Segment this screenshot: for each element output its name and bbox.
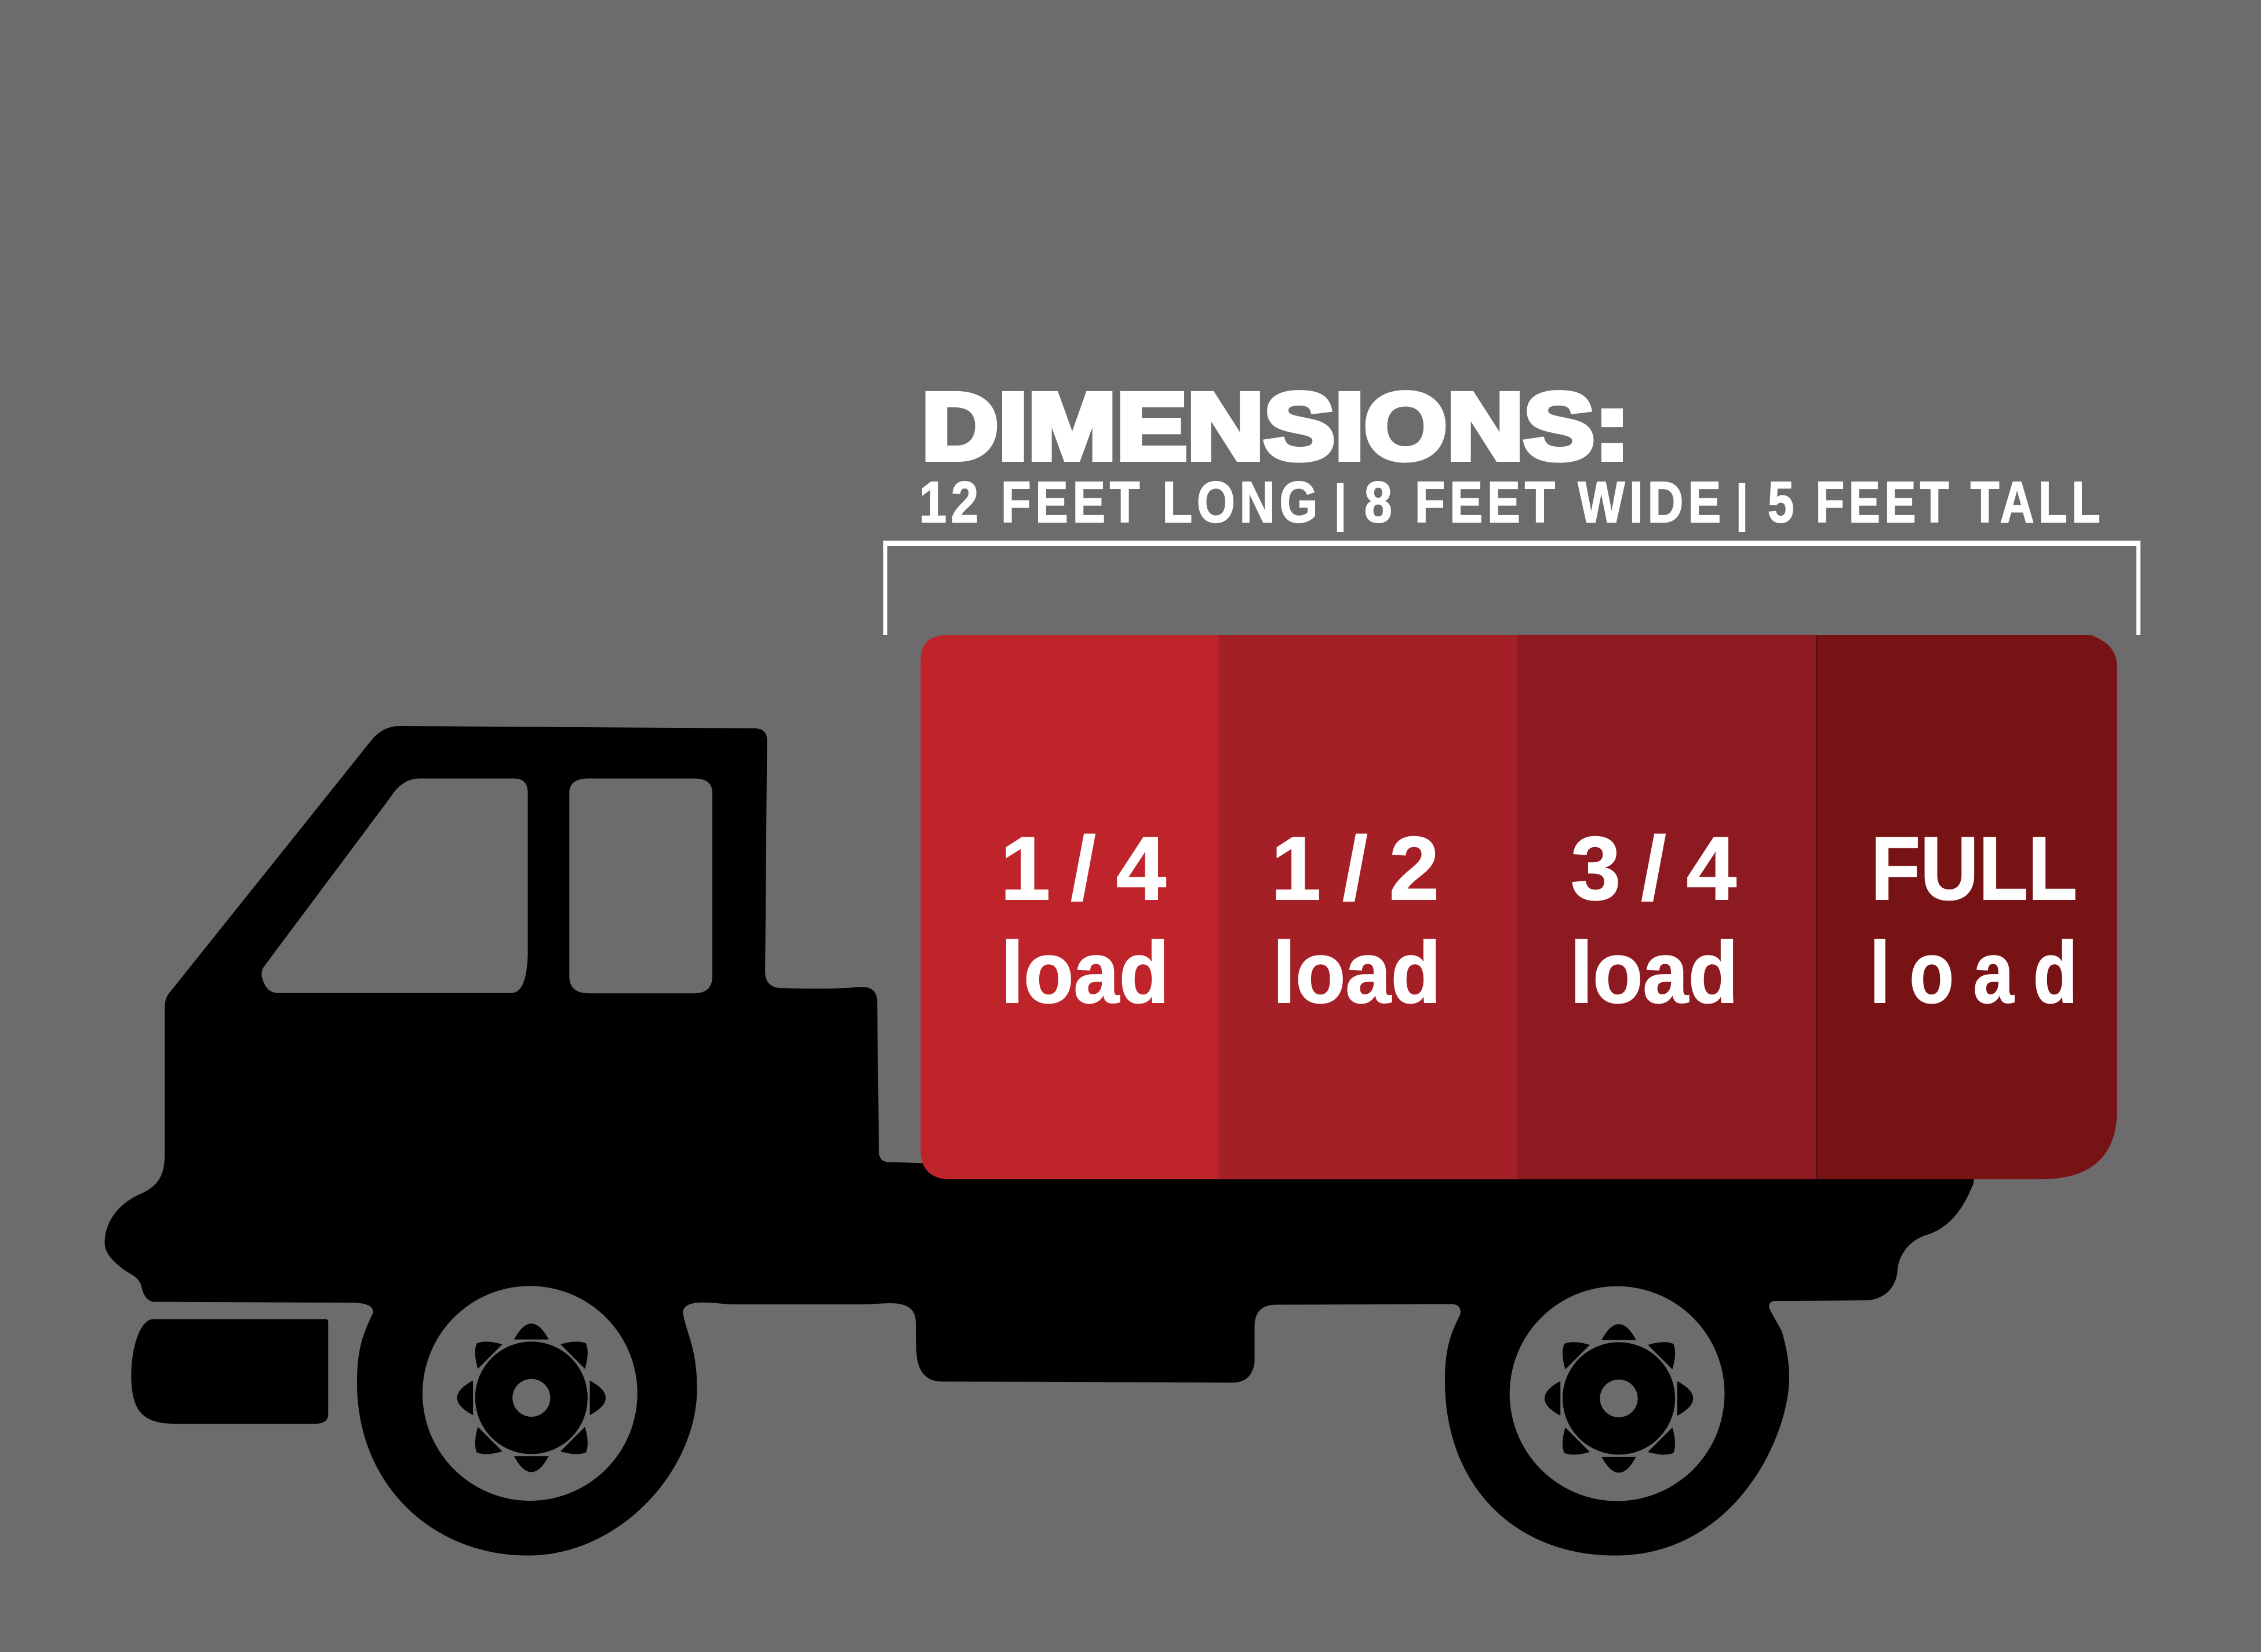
length: 12 FEET LONG <box>919 470 1322 535</box>
heading: dimensions: DIMENSIONS: <box>922 373 1630 479</box>
label: full load <box>1870 818 2097 1021</box>
segment: full load <box>1816 635 2117 1179</box>
cargo box with load segments <box>920 635 2117 1179</box>
front bumper <box>131 1319 328 1424</box>
rear window <box>569 779 712 993</box>
truck body <box>105 726 1974 1556</box>
dimension bracket <box>883 541 2140 635</box>
segment: quarter load <box>920 635 1219 1179</box>
truck silhouette <box>105 726 1974 1556</box>
segment: half load <box>1218 635 1518 1179</box>
label: 1/4 load <box>1000 818 1169 1021</box>
label: 1/4 load: load <box>1001 924 1169 1021</box>
label: 3/4 load <box>1570 818 1738 1021</box>
subheading: measurements <box>919 470 2105 535</box>
label: full load: load <box>1870 924 2097 1021</box>
label: 1/2 load: load <box>1273 924 1441 1021</box>
front wheel hub <box>423 1286 638 1501</box>
label: 1/4 load: 1/4 <box>1000 818 1166 918</box>
label: 1/2 load: 1/2 <box>1271 818 1439 918</box>
label: 3/4 load: load <box>1570 924 1738 1021</box>
height: 5 FEET TALL <box>1768 470 2105 535</box>
separator: | <box>1735 473 1749 532</box>
label: 1/2 load <box>1271 818 1441 1021</box>
label: 3/4 load: 3/4 <box>1571 818 1736 918</box>
rear wheel hub <box>1510 1286 1724 1501</box>
separator: | <box>1333 473 1348 532</box>
segment divider <box>1816 636 1817 1179</box>
label: full load: FULL <box>1871 818 2077 918</box>
segment: three quarter load <box>1517 635 1817 1179</box>
front window <box>261 779 528 993</box>
width: 8 FEET WIDE <box>1364 470 1725 535</box>
